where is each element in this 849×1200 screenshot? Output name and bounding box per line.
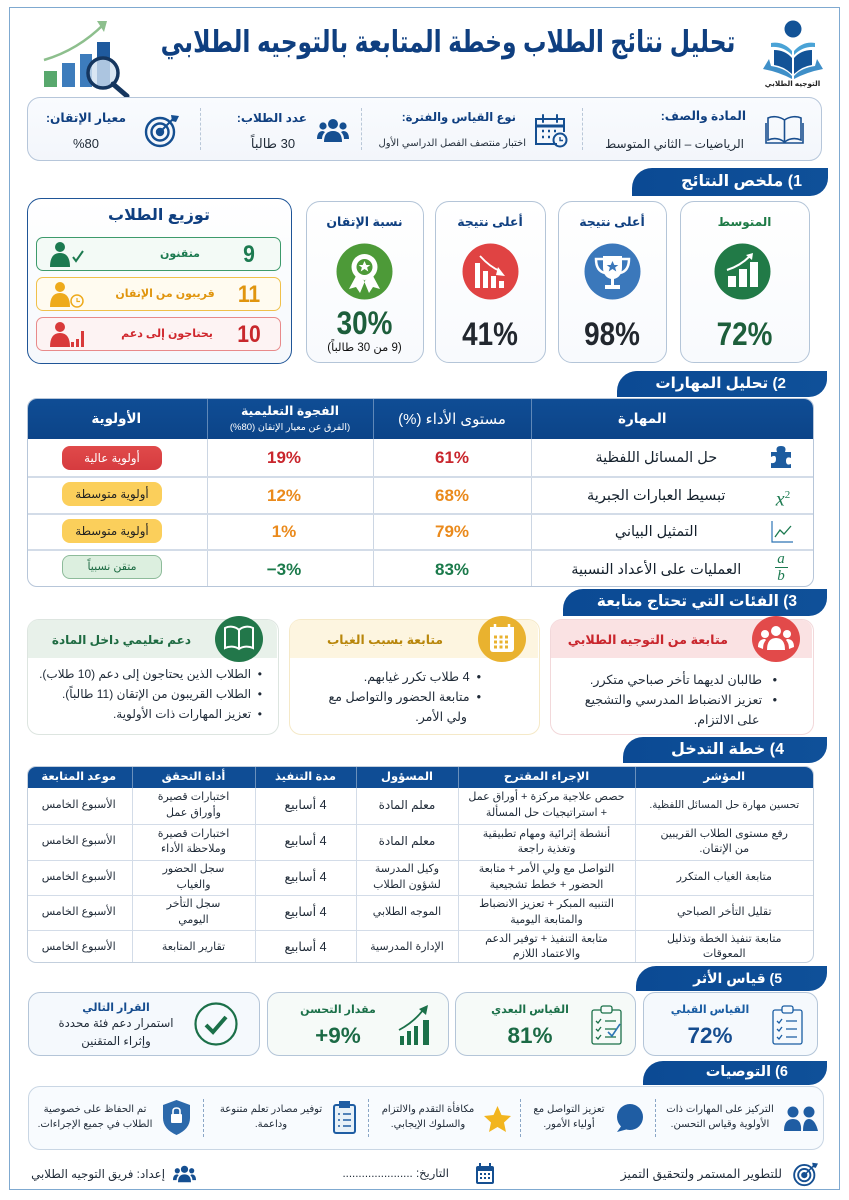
table: intervention plan: أداة التحقق <box>162 771 225 783</box>
table: skills analysis: 79% <box>435 522 469 541</box>
icon: calendar <box>535 114 568 148</box>
table: intervention plan: اختبارات قصيرة <box>158 791 229 803</box>
table: skills analysis: تبسيط العبارات الجبرية <box>587 488 725 504</box>
icon: line graph <box>771 521 793 543</box>
table: intervention plan: المؤشر <box>703 771 745 783</box>
panel: subject support <box>27 619 279 735</box>
section heading 6 <box>643 1061 827 1085</box>
section heading 2 <box>617 371 827 397</box>
table: intervention plan: اختبارات قصيرة <box>158 828 229 840</box>
label: القرار التالي <box>82 1002 150 1014</box>
decision text <box>58 1017 174 1048</box>
count: 11 <box>238 281 260 308</box>
panel: recommendations <box>28 1086 824 1150</box>
icon: fraction: b <box>777 568 785 584</box>
icon: people circle <box>752 616 800 662</box>
decision text: استمرار دعم فئة محددة <box>58 1017 174 1030</box>
table: skills analysis: 68% <box>435 486 469 504</box>
table: intervention plan: الأسبوع الخامس <box>42 940 116 952</box>
icon: people <box>173 1163 196 1185</box>
icon: open book <box>765 116 804 144</box>
table: intervention plan: تقليل التأخر الصباحي <box>677 906 772 918</box>
badge: high priority <box>62 446 162 470</box>
table: skills analysis: حل المسائل اللفظية <box>595 450 717 466</box>
table: skills analysis: الفجوة التعليمية <box>241 404 339 418</box>
icon: fraction <box>775 551 788 584</box>
bullet list: • متابعة الحضور والتواصل مع <box>328 690 481 704</box>
table: intervention plan: موعد المتابعة <box>41 771 116 783</box>
footer <box>31 1162 818 1186</box>
badge: high priority: أولوية عالية <box>84 451 140 465</box>
section heading 1: 1) ملخص النتائج <box>681 173 802 190</box>
value: 41% <box>462 316 518 352</box>
table: intervention plan: المسؤول <box>381 771 433 783</box>
icon: calendar circle <box>478 616 526 662</box>
header band <box>551 620 812 658</box>
table: intervention plan: الأسبوع الخامس <box>42 799 116 811</box>
bullet list <box>585 671 777 728</box>
label: مقدار التحسن <box>300 1004 376 1016</box>
panel: guidance follow-up <box>550 619 814 735</box>
recommendation 2: تعزيز التواصل مع <box>533 1104 605 1115</box>
icon: growth bars <box>714 244 770 300</box>
header band <box>28 620 277 658</box>
bullet list <box>39 667 262 721</box>
table: skills analysis: 1% <box>272 522 296 541</box>
table: intervention plan: معلم المادة <box>379 798 435 812</box>
bullet list: على الالتزام. <box>694 713 760 727</box>
icon: fraction: a <box>777 551 785 567</box>
table: intervention plan: تقارير المتابعة <box>162 940 225 952</box>
section heading 4: 4) خطة التدخل <box>671 741 784 758</box>
table: intervention plan: من الإتقان. <box>699 843 749 855</box>
table: intervention plan: سجل الحضور <box>163 863 224 875</box>
icon: shield lock <box>163 1100 190 1135</box>
logo <box>763 20 823 88</box>
table: intervention plan: التنبيه المبكر + تعزيز الانضباط <box>479 898 614 910</box>
icon: person clock <box>50 282 84 308</box>
recommendation 2: أولياء الأمور. <box>543 1119 595 1130</box>
icon: book circle <box>215 616 263 662</box>
section heading 5: 5) قياس الأثر <box>693 970 782 986</box>
recommendation 4: وداعمة. <box>255 1119 287 1130</box>
label: القياس البعدي <box>491 1004 569 1016</box>
table: intervention plan: تحسين مهارة حل المسائل اللفظية. <box>649 800 799 811</box>
section heading 2: 2) تحليل المهارات <box>655 375 786 392</box>
panel: info bar <box>27 97 822 161</box>
label: يحتاجون إلى دعم <box>121 328 213 340</box>
logo: التوجيه الطلابي <box>765 79 820 88</box>
icon: puzzle <box>771 446 791 468</box>
icon: person bars <box>50 322 84 347</box>
badge: relatively mastered: متقن نسبياً <box>87 561 137 573</box>
icon: people <box>317 119 349 142</box>
badge: medium priority: أولوية متوسطة <box>75 524 149 538</box>
subject label: المادة والصف: <box>661 109 746 123</box>
table: skills analysis: التمثيل البياني <box>615 524 698 540</box>
table: intervention plan: الأسبوع الخامس <box>42 835 116 847</box>
row: mastered <box>36 237 281 271</box>
table: intervention plan: 4 أسابيع <box>284 798 327 812</box>
measure type value: اختبار منتصف الفصل الدراسي الأول <box>378 138 526 149</box>
table: intervention plan: متابعة التنفيذ + توفير الدعم <box>485 933 608 945</box>
badge: medium priority: أولوية متوسطة <box>75 487 149 501</box>
recommendation 3: والسلوك الإيجابي. <box>391 1119 465 1130</box>
recommendation 5: الطلاب في جميع الإجراءات. <box>38 1119 152 1130</box>
icon: target <box>144 115 179 148</box>
section heading 3 <box>563 589 827 616</box>
table: intervention plan: أنشطة إثرائية ومهام تطبيقية <box>483 828 610 840</box>
table: intervention plan: وتغذية راجعة <box>518 843 575 855</box>
table: intervention plan: حصص علاجية مركزة + أوراق عمل <box>468 791 625 803</box>
section heading 1 <box>632 168 828 196</box>
badge: relatively mastered <box>62 555 162 579</box>
card: highest score <box>558 201 667 363</box>
table: skills analysis: 12% <box>267 486 301 504</box>
icon: person check <box>50 242 84 267</box>
icon: target <box>793 1162 818 1186</box>
icon: award ribbon <box>336 244 392 300</box>
icon: x squared: x2 <box>776 489 790 511</box>
table: intervention plan: المعوقات <box>703 948 746 960</box>
table: skills analysis <box>27 398 814 587</box>
recommendation 4 <box>220 1104 322 1130</box>
table: intervention plan: والاعتماد اللازم <box>513 948 580 960</box>
table: intervention plan: 4 أسابيع <box>284 834 327 848</box>
section heading 3: 3) الفئات التي تحتاج متابعة <box>597 593 797 610</box>
table: skills analysis: 83% <box>435 560 469 578</box>
value: 81% <box>507 1023 553 1048</box>
row: near mastery <box>36 277 281 311</box>
recommendation 2 <box>533 1104 605 1130</box>
table: intervention plan: اليومي <box>178 914 209 926</box>
table: skills analysis: الأولوية <box>91 411 141 426</box>
table: intervention plan: وملاحظة الأداء <box>161 843 226 855</box>
table: intervention plan: متابعة تنفيذ الخطة وتذليل <box>667 933 782 945</box>
mastery value: %80 <box>73 136 99 151</box>
bullet list: ولي الأمر. <box>415 710 467 724</box>
recommendation 1 <box>666 1104 774 1130</box>
table: skills analysis: مستوى الأداء (%) <box>398 411 506 428</box>
icon: rising bars arrow <box>398 1005 429 1045</box>
table: skills analysis: 61% <box>435 448 469 466</box>
table: intervention plan: وكيل المدرسة <box>375 863 439 875</box>
bullet list: • الطلاب الذين يحتاجون إلى دعم (10 طلاب). <box>39 667 262 681</box>
card heading: دعم تعليمي داخل المادة <box>52 633 191 647</box>
icon: checklist <box>333 1101 356 1134</box>
icon: trophy <box>584 244 640 300</box>
icon: clipboard checked <box>591 1005 622 1045</box>
table: intervention plan <box>27 766 814 963</box>
decision text: وإثراء المتقنين <box>81 1035 151 1048</box>
icon: two people <box>784 1106 818 1131</box>
title: تحليل نتائج الطلاب وخطة المتابعة بالتوجيه الطلابي <box>161 26 735 59</box>
table: skills analysis: −3% <box>267 560 301 578</box>
table: intervention plan: والمتابعة اليومية <box>510 914 583 926</box>
table: intervention plan: الحضور + خطط تشجيعية <box>490 878 603 890</box>
table: intervention plan: والغياب <box>176 878 211 890</box>
bullet list: • طالبان لديهما تأخر صباحي متكرر. <box>590 673 777 687</box>
card label: المتوسط <box>718 215 771 229</box>
count: 10 <box>237 321 261 348</box>
subject value: الرياضيات – الثاني المتوسط <box>605 137 744 151</box>
table: intervention plan: مدة التنفيذ <box>275 771 336 783</box>
table: intervention plan: + استراتيجيات حل المسألة <box>486 807 607 819</box>
card label: أعلى نتيجة <box>579 215 645 229</box>
header band <box>290 620 538 658</box>
prepared by: إعداد: فريق التوجيه الطلابي <box>31 1167 165 1181</box>
card: pre measure <box>643 992 818 1056</box>
card: lowest score <box>435 201 546 363</box>
panel: student distribution <box>27 198 292 364</box>
value: +9% <box>315 1023 361 1048</box>
icon: clipboard <box>772 1005 803 1045</box>
panel: absence follow-up <box>289 619 540 735</box>
card: post measure <box>455 992 636 1056</box>
card: mastery rate <box>306 201 424 363</box>
icon: check circle <box>194 1002 238 1046</box>
recommendation 1: التركيز على المهارات ذات <box>666 1104 774 1115</box>
table: intervention plan: 4 أسابيع <box>284 870 327 884</box>
value: 30% <box>337 305 392 341</box>
icon: falling bars <box>462 244 518 300</box>
date field: التاريخ: ...................... <box>342 1168 449 1180</box>
measure type label: نوع القياس والفترة: <box>402 111 516 124</box>
label: القياس القبلي <box>671 1004 749 1016</box>
section heading 4 <box>623 737 827 763</box>
table: skills analysis: 19% <box>267 448 301 466</box>
badge: medium priority <box>62 482 162 506</box>
recommendation 5: تم الحفاظ على خصوصية <box>44 1104 146 1115</box>
table: skills analysis: العمليات على الأعداد النسبية <box>571 562 741 578</box>
recommendation 3: مكافأة التقدم والالتزام <box>382 1104 474 1115</box>
bullet list <box>328 670 481 724</box>
icon: star <box>484 1106 511 1132</box>
card: average <box>680 201 810 363</box>
card label: نسبة الإتقان <box>326 215 403 229</box>
table: intervention plan: الأسبوع الخامس <box>42 906 116 918</box>
panel heading: توزيع الطلاب <box>108 207 210 224</box>
bullet list: • تعزيز المهارات ذات الأولوية. <box>113 707 262 721</box>
table: intervention plan: لشؤون الطلاب <box>373 878 441 890</box>
table: intervention plan: سجل التأخر <box>167 898 220 910</box>
table: intervention plan: الأسبوع الخامس <box>42 871 116 883</box>
label: قريبون من الإتقان <box>115 288 215 300</box>
recommendation 3 <box>382 1102 474 1130</box>
footer slogan: للتطوير المستمر ولتحقيق التميز <box>621 1167 782 1181</box>
student count value: 30 طالباً <box>251 136 295 151</box>
recommendation 1: الأولوية وقياس التحسن. <box>671 1119 769 1130</box>
label: متقنون <box>160 248 200 260</box>
card: improvement <box>267 992 449 1056</box>
table: intervention plan: معلم المادة <box>379 834 435 848</box>
recommendation 5 <box>38 1104 152 1130</box>
note: (9 من 30 طالباً) <box>327 342 402 354</box>
student count label: عدد الطلاب: <box>237 111 307 125</box>
table: intervention plan: وأوراق عمل <box>166 807 221 819</box>
table: intervention plan: 4 أسابيع <box>284 940 327 954</box>
section heading 5 <box>636 966 827 991</box>
recommendation 4: توفير مصادر تعلم متنوعة <box>220 1104 322 1115</box>
table: intervention plan: الموجه الطلابي <box>373 906 441 918</box>
value: 98% <box>584 316 640 352</box>
table: intervention plan: الإدارة المدرسية <box>370 940 444 952</box>
table: skills analysis: (الفرق عن معيار الإتقان (80%) <box>230 422 350 432</box>
card: next decision <box>28 992 260 1056</box>
table: intervention plan: التواصل مع ولي الأمر + متابعة <box>479 863 614 875</box>
card heading: متابعة من التوجيه الطلابي <box>568 633 728 647</box>
table: intervention plan: رفع مستوى الطلاب القريبين <box>661 828 788 840</box>
count: 9 <box>243 241 255 268</box>
section heading 6: 6) التوصيات <box>706 1064 788 1080</box>
table: intervention plan: متابعة الغياب المتكرر <box>677 871 772 883</box>
card label: أعلى نتيجة <box>457 215 523 229</box>
table: skills analysis: المهارة <box>618 411 666 426</box>
bullet list: • تعزيز الانضباط المدرسي والتشجيع <box>585 693 777 707</box>
row: need support <box>36 317 281 351</box>
mastery label: معيار الإتقان: <box>46 111 126 125</box>
badge: medium priority <box>62 519 162 543</box>
card heading: متابعة بسبب الغياب <box>327 633 443 647</box>
bullet list: • الطلاب القريبون من الإتقان (11 طالباً). <box>62 687 262 701</box>
bullet list: • 4 طلاب تكرر غيابهم. <box>364 670 481 684</box>
icon: chart with magnifier <box>44 21 130 97</box>
value: 72% <box>717 316 772 352</box>
table: intervention plan: الإجراء المقترح <box>504 771 589 783</box>
table: intervention plan: 4 أسابيع <box>284 905 327 919</box>
icon: calendar <box>475 1163 495 1185</box>
icon: speech bubble <box>617 1104 643 1132</box>
value: 72% <box>687 1023 733 1048</box>
